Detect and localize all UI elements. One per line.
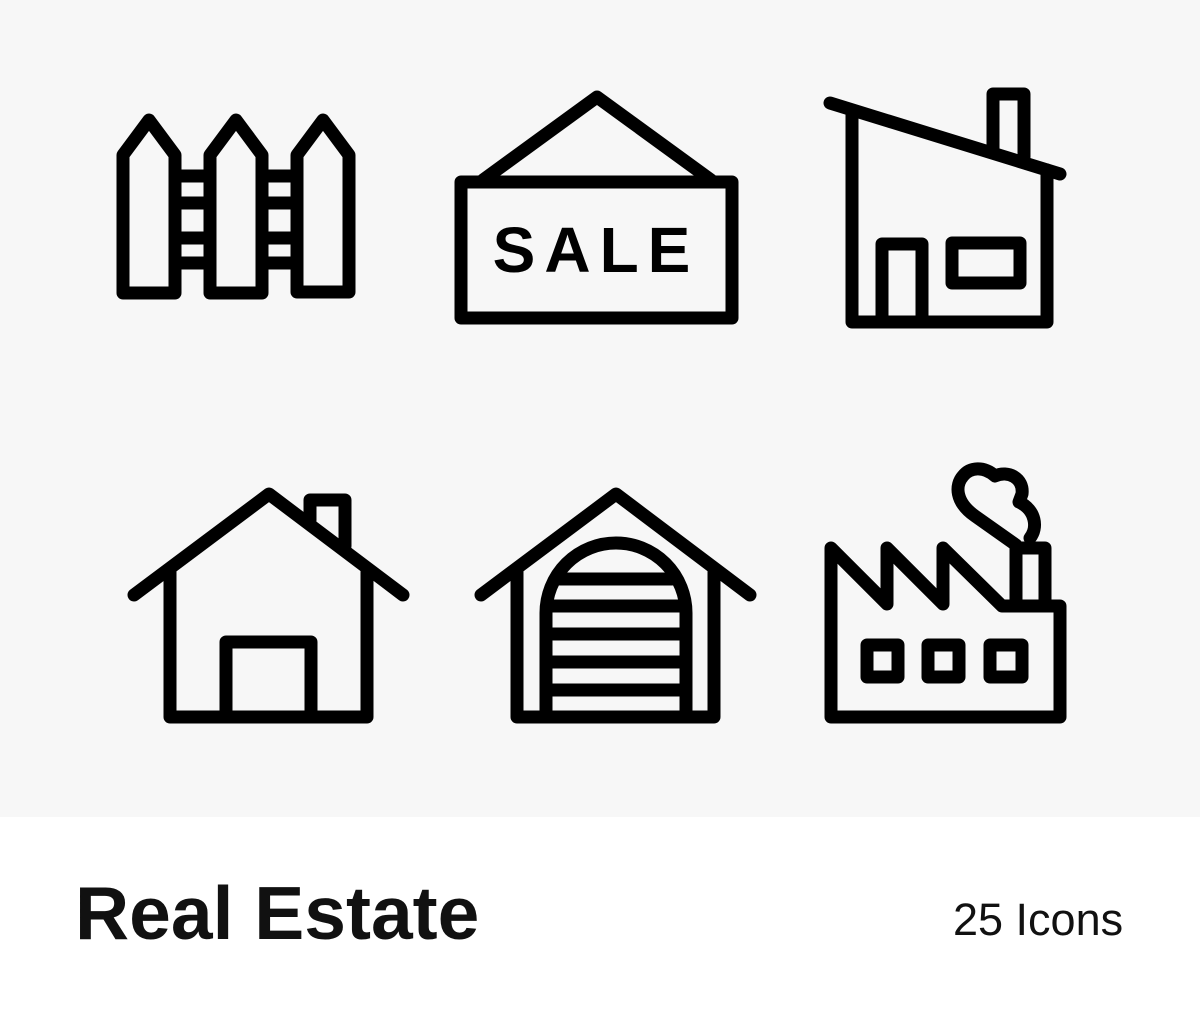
icon: fence — [123, 120, 349, 293]
icon count: 25 Icons — [953, 894, 1123, 945]
icon: sale sign: SALE — [493, 214, 699, 286]
icon: modern house — [830, 94, 1060, 322]
icon: garage — [481, 494, 750, 717]
icon: house — [134, 494, 403, 717]
title: Real Estate — [75, 871, 479, 955]
icon: factory — [831, 469, 1060, 717]
icon: sale sign — [461, 97, 732, 318]
